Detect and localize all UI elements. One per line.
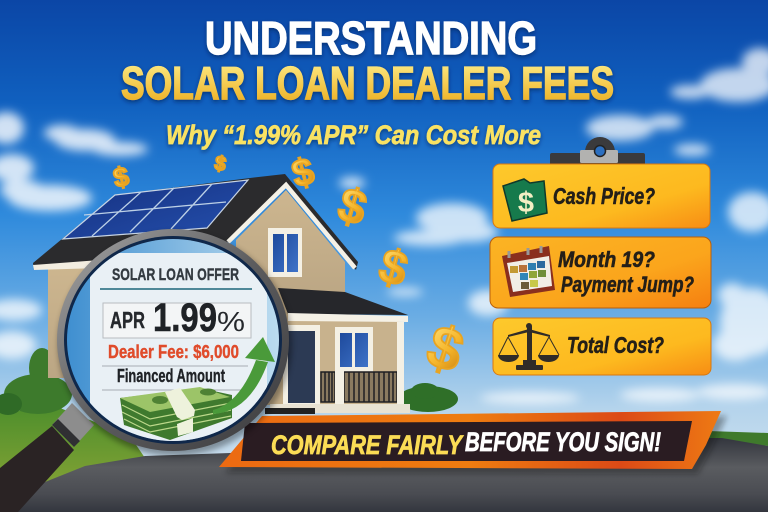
card: month 19 bbox=[490, 237, 711, 308]
porch roof bbox=[278, 288, 408, 315]
gable trim bbox=[228, 185, 355, 268]
lower wall bbox=[236, 295, 296, 405]
lens contents bbox=[90, 253, 275, 443]
main roof bbox=[33, 174, 358, 270]
lens shadow bbox=[58, 232, 292, 456]
label: Cash Price? bbox=[553, 183, 655, 209]
solar panels bbox=[63, 180, 248, 239]
APR box: 1.99 bbox=[153, 296, 217, 340]
main wall bbox=[48, 266, 168, 378]
label line 1: Month 19? bbox=[558, 247, 655, 272]
icon: scales bbox=[498, 323, 559, 370]
title line 1: UNDERSTANDING bbox=[205, 12, 537, 64]
icon: calendar bbox=[502, 246, 555, 297]
floating dollar signs: $ bbox=[373, 239, 414, 297]
financed amount bbox=[102, 366, 248, 390]
APR box bbox=[102, 302, 252, 338]
handle bbox=[0, 426, 74, 512]
icon: dollar bill bbox=[503, 179, 547, 221]
label line 2: Payment Jump? bbox=[561, 272, 694, 297]
gable wall bbox=[236, 190, 345, 300]
financed amount: Financed Amount bbox=[117, 366, 225, 386]
porch post bbox=[397, 322, 404, 406]
floating dollar signs bbox=[111, 150, 472, 386]
subtitle: Why “1.99% APR” Can Cost More bbox=[166, 120, 541, 150]
paper bbox=[90, 253, 267, 443]
magnifying glass bbox=[0, 229, 292, 512]
collar bbox=[52, 403, 94, 447]
banner bbox=[219, 411, 727, 474]
floating dollar signs: $ bbox=[213, 152, 228, 176]
left bush bbox=[0, 348, 72, 415]
upper window bbox=[268, 228, 302, 277]
right bush bbox=[398, 383, 458, 412]
APR box: % bbox=[217, 306, 245, 337]
door bbox=[283, 325, 320, 405]
floating dollar signs: $ bbox=[288, 150, 318, 196]
title line 2: SOLAR LOAN DEALER FEES bbox=[121, 57, 614, 109]
floating dollar signs: $ bbox=[332, 178, 373, 236]
floating dollar signs: $ bbox=[111, 161, 132, 193]
lawn bbox=[0, 408, 145, 500]
porch window bbox=[335, 327, 373, 373]
horizon grass right bbox=[708, 431, 768, 446]
money stack bbox=[120, 387, 232, 440]
road bbox=[0, 438, 768, 512]
title bbox=[121, 12, 614, 150]
lens glass bbox=[67, 239, 279, 441]
card: total cost bbox=[493, 318, 711, 375]
porch wall bbox=[287, 320, 399, 404]
clouds bbox=[0, 48, 768, 404]
APR box: APR bbox=[110, 307, 145, 333]
label: Total Cost? bbox=[567, 332, 664, 358]
porch steps bbox=[265, 404, 410, 414]
floating dollar signs: $ bbox=[419, 311, 472, 386]
clipboard clip bbox=[550, 137, 645, 171]
heading rule bbox=[100, 288, 252, 290]
porch railing bbox=[321, 369, 397, 407]
card: cash price bbox=[493, 164, 710, 228]
eave trim bbox=[33, 260, 100, 270]
offer heading: SOLAR LOAN OFFER bbox=[112, 265, 239, 284]
icon: dollar bill: $ bbox=[518, 187, 534, 219]
banner text white: BEFORE YOU SIGN! bbox=[465, 427, 661, 457]
growth arrow bbox=[213, 337, 275, 414]
dealer fee: Dealer Fee: $6,000 bbox=[108, 342, 239, 362]
banner text yellow: COMPARE FAIRLY bbox=[271, 430, 464, 460]
house bbox=[33, 174, 410, 414]
porch trim bbox=[288, 313, 408, 322]
lens rim bbox=[57, 229, 289, 451]
